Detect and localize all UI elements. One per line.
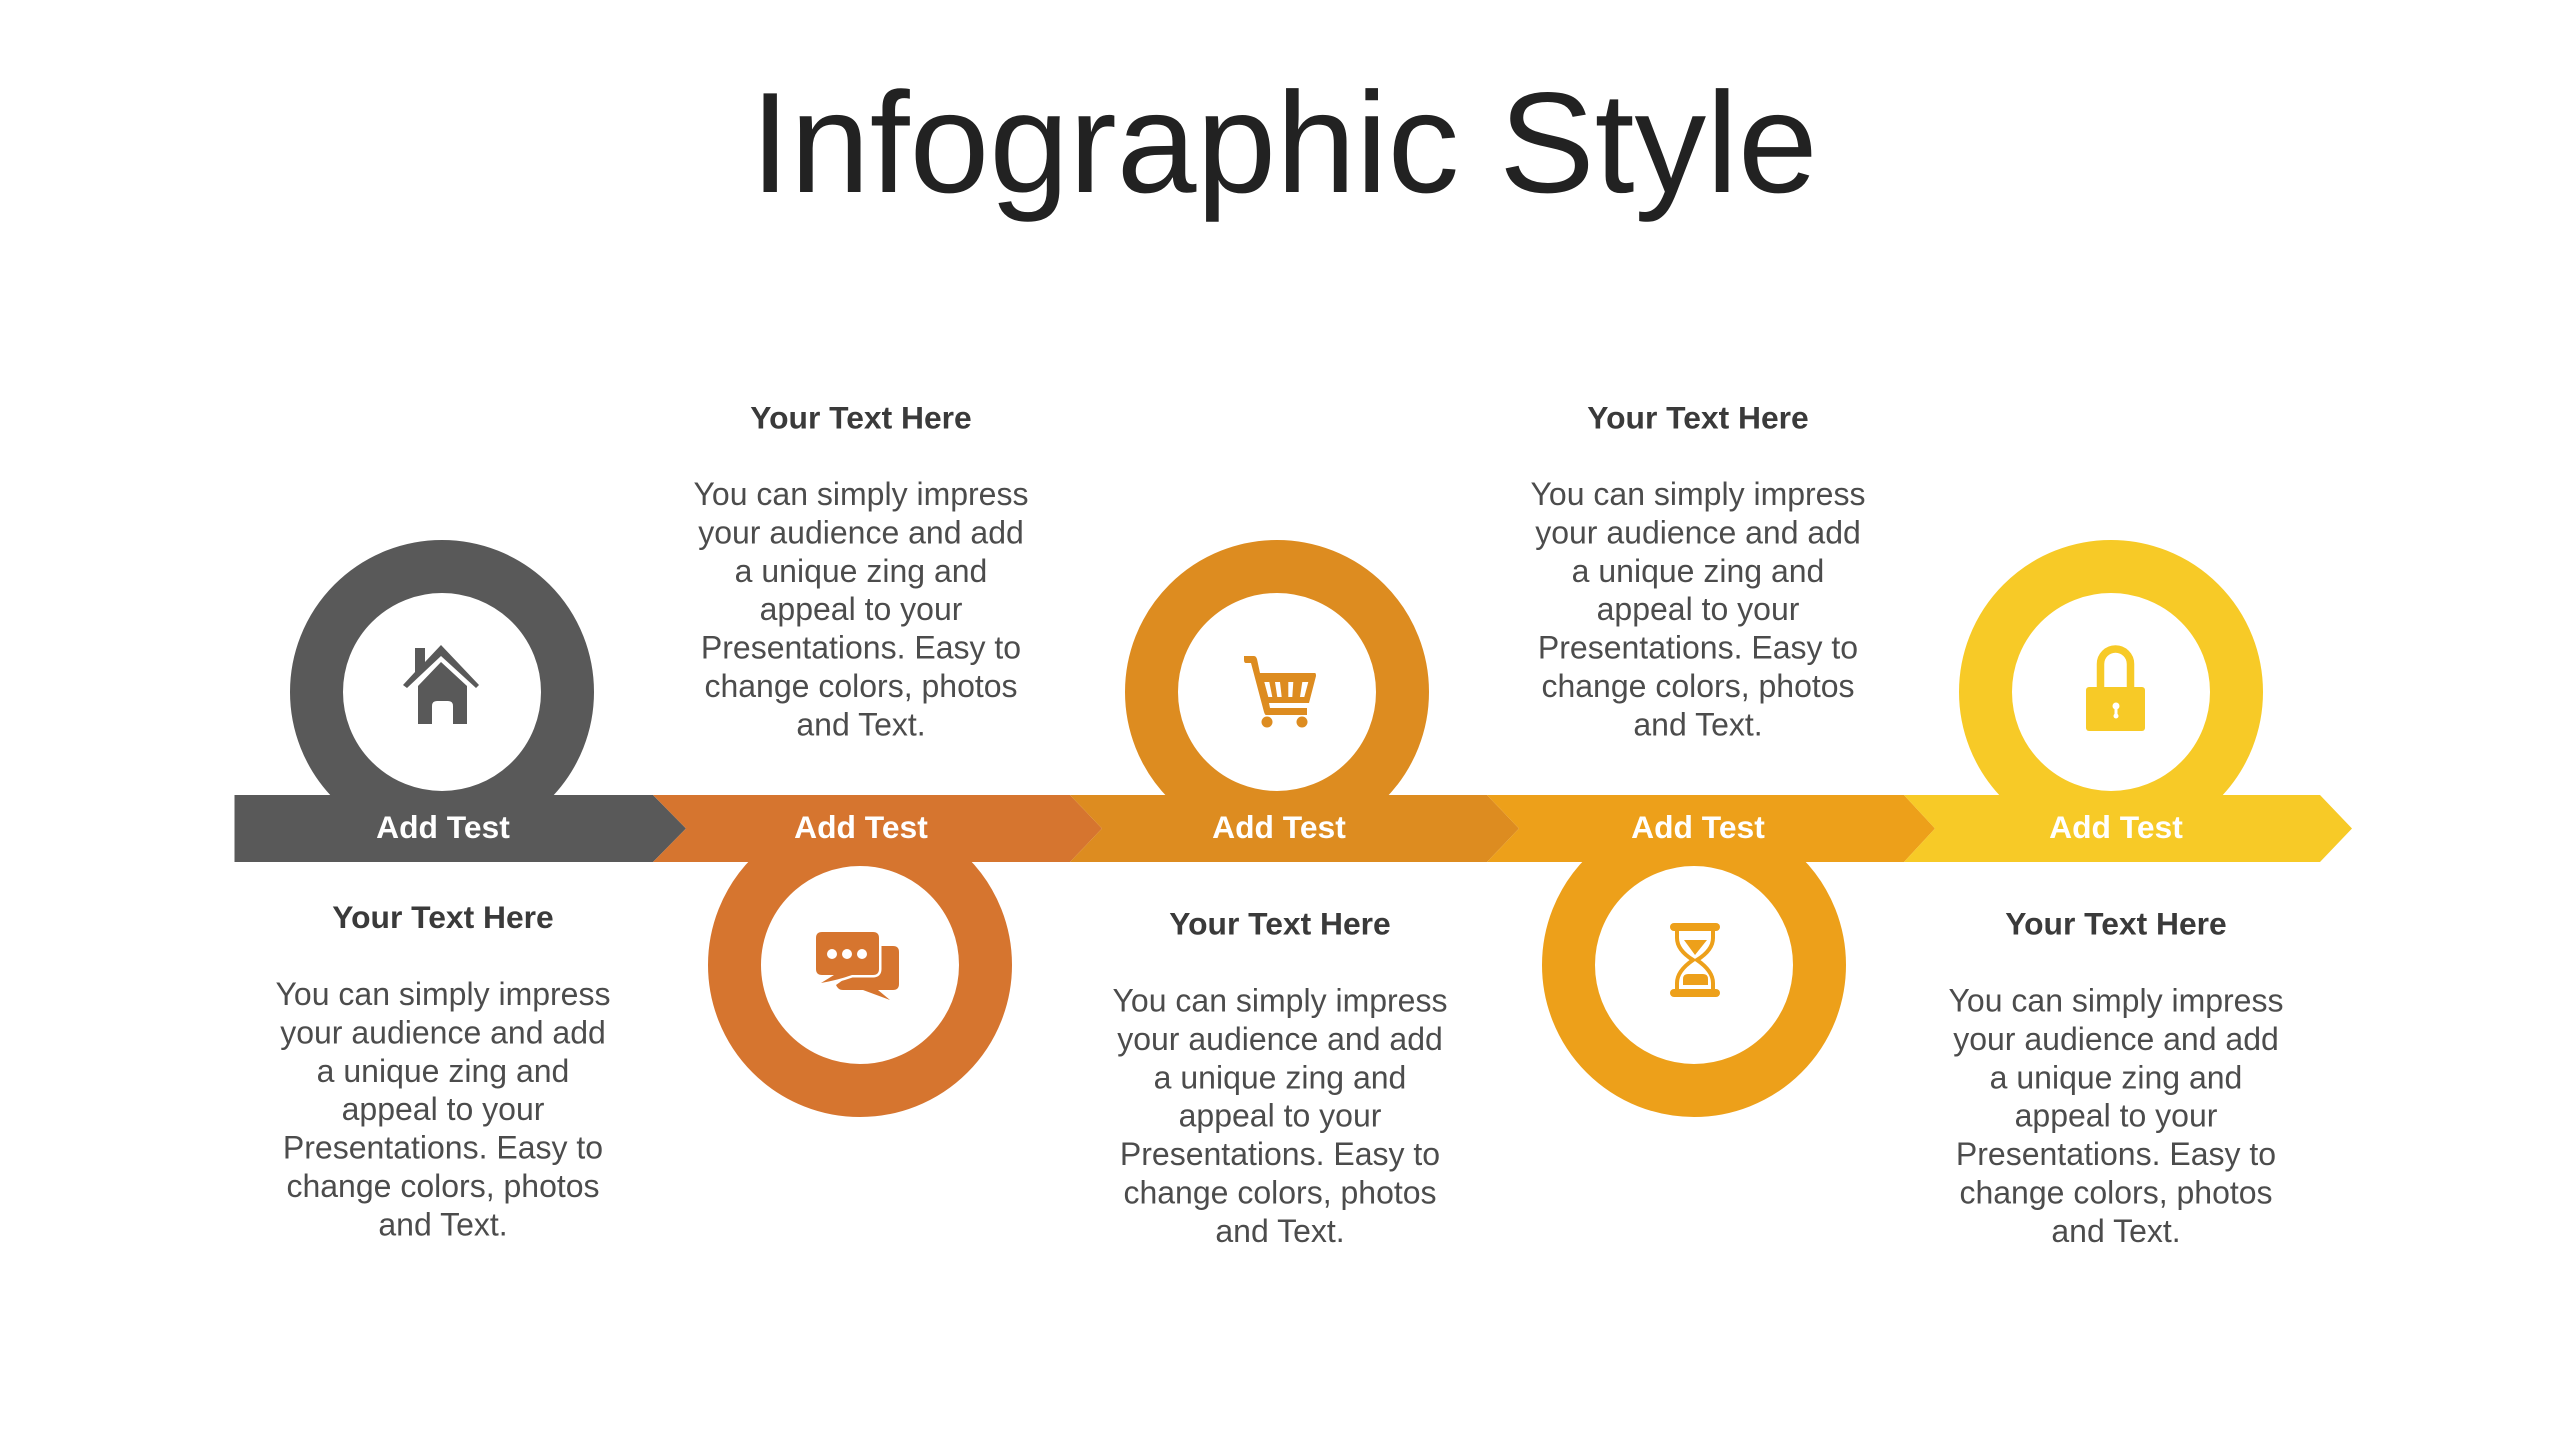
body: step 1: your audience and add: [280, 1014, 606, 1050]
text block: step 4: [1531, 400, 1865, 742]
arrow bar: step 4: [1487, 795, 1935, 862]
bar label: step 3: Add Test: [1212, 809, 1346, 845]
heading: step 3: Your Text Here: [1169, 906, 1391, 942]
body: step 4: Presentations. Easy to: [1538, 630, 1858, 666]
arrow bar: step 2: [653, 795, 1102, 862]
body: step 1: Presentations. Easy to: [283, 1130, 603, 1166]
heading: step 5: Your Text Here: [2005, 906, 2227, 942]
body: step 5: and Text.: [2051, 1213, 2181, 1249]
ring: step 1: [316, 566, 568, 818]
body: step 3: You can simply impress: [1113, 982, 1447, 1018]
body: step 4: a unique zing and: [1572, 553, 1824, 589]
body: step 3: your audience and add: [1117, 1021, 1443, 1057]
body: step 2: a unique zing and: [735, 553, 987, 589]
body: step 4: and Text.: [1633, 706, 1763, 742]
body: step 4: [1531, 476, 1865, 742]
title: Infographic Style: [750, 63, 1818, 223]
body: step 4: appeal to your: [1597, 591, 1800, 627]
icon: hourglass: [1670, 923, 1720, 997]
bar label: step 5: Add Test: [2049, 809, 2183, 845]
body: step 4: your audience and add: [1535, 514, 1861, 550]
arrow bar: step 5: [1904, 795, 2352, 862]
body: step 1: and Text.: [378, 1206, 508, 1242]
body: step 1: appeal to your: [342, 1091, 545, 1127]
text block: step 1: [276, 899, 610, 1242]
body: step 3: and Text.: [1215, 1213, 1345, 1249]
body: step 5: Presentations. Easy to: [1956, 1136, 2276, 1172]
body: step 2: and Text.: [796, 706, 926, 742]
body: step 5: appeal to your: [2015, 1098, 2218, 1134]
body: step 3: [1113, 982, 1447, 1249]
body: step 1: change colors, photos: [286, 1168, 600, 1204]
body: step 3: appeal to your: [1179, 1098, 1382, 1134]
body: step 3: Presentations. Easy to: [1120, 1136, 1440, 1172]
body: step 2: change colors, photos: [704, 668, 1018, 704]
body: step 4: change colors, photos: [1541, 668, 1855, 704]
bar label: step 2: Add Test: [794, 809, 928, 845]
arrow bar: step 3: [1070, 795, 1519, 862]
step 4: hourglass: [1487, 400, 1935, 1090]
body: step 2: your audience and add: [698, 514, 1024, 550]
body: step 5: a unique zing and: [1990, 1059, 2242, 1095]
arrow bar: step 1: [234, 795, 686, 862]
body: step 2: Presentations. Easy to: [701, 630, 1021, 666]
body: step 5: your audience and add: [1953, 1021, 2279, 1057]
body: step 1: [276, 976, 610, 1242]
icon: padlock: [2086, 649, 2145, 731]
body: step 1: a unique zing and: [317, 1053, 569, 1089]
heading: step 1: Your Text Here: [332, 899, 554, 935]
ring: step 2: [734, 840, 986, 1090]
text block: step 5: [1949, 906, 2283, 1249]
heading: step 2: Your Text Here: [750, 400, 972, 436]
body: step 5: You can simply impress: [1949, 982, 2283, 1018]
step 2: chat: [653, 400, 1102, 1090]
icon: shopping cart: [1244, 656, 1316, 728]
icon: chat bubbles: [816, 932, 899, 1000]
step 5: lock: [1904, 566, 2352, 1249]
body: step 4: You can simply impress: [1531, 476, 1865, 512]
text block: step 3: [1113, 906, 1447, 1249]
step 3: cart: [1070, 566, 1519, 1249]
body: step 2: appeal to your: [760, 591, 963, 627]
heading: step 4: Your Text Here: [1587, 400, 1809, 436]
body: step 5: change colors, photos: [1959, 1174, 2273, 1210]
body: step 5: [1949, 982, 2283, 1249]
body: step 2: You can simply impress: [694, 476, 1028, 512]
ring: step 4: [1568, 840, 1820, 1090]
bar label: step 4: Add Test: [1631, 809, 1765, 845]
ring: step 3: [1152, 566, 1402, 818]
ring: step 5: [1986, 566, 2236, 818]
bar label: step 1: Add Test: [376, 809, 510, 845]
icon: house: [403, 645, 479, 724]
step 1: home: [234, 566, 686, 1242]
body: step 2: [694, 476, 1028, 742]
body: step 3: change colors, photos: [1123, 1174, 1437, 1210]
text block: step 2: [694, 400, 1028, 742]
body: step 1: You can simply impress: [276, 976, 610, 1012]
body: step 3: a unique zing and: [1154, 1059, 1406, 1095]
